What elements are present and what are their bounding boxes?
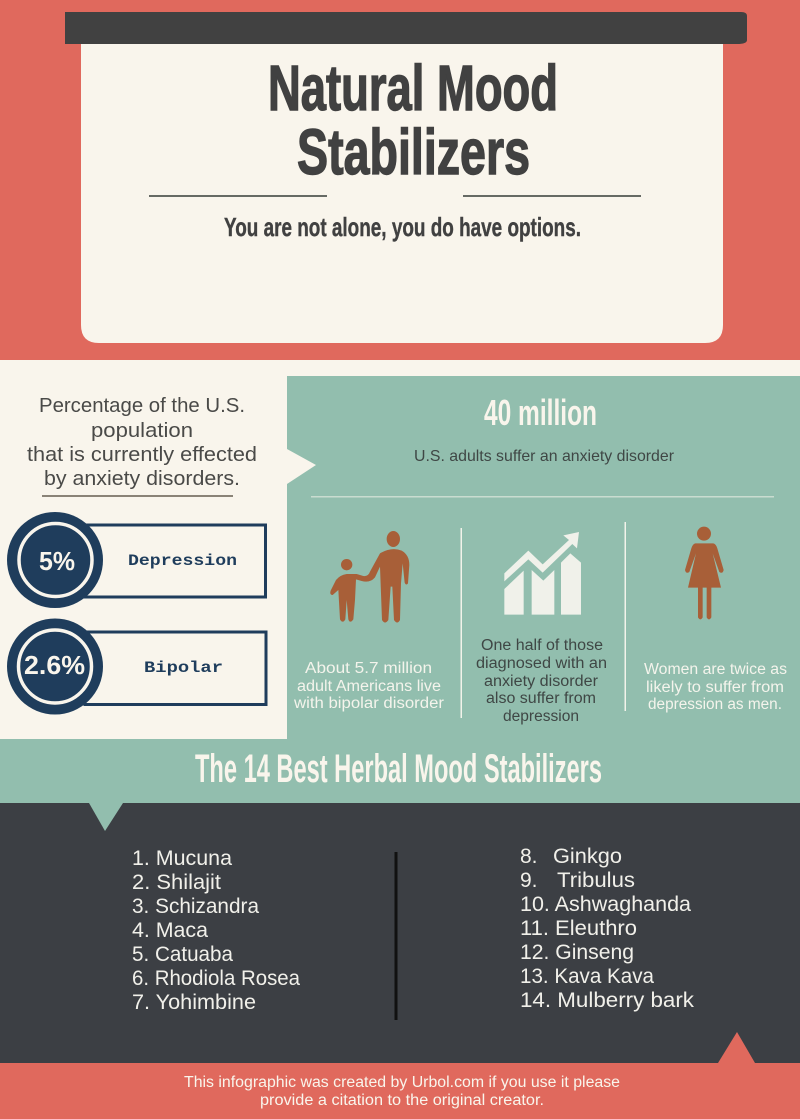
list: herbs 8 to 14: 12. Ginseng bbox=[520, 941, 634, 964]
title: Stabilizers bbox=[297, 116, 530, 188]
icon: rising chart bbox=[504, 532, 581, 615]
text: diagnosis fact: One half of those bbox=[481, 637, 603, 654]
text: women fact: likely to suffer from bbox=[646, 679, 784, 696]
pointer up bbox=[718, 1032, 755, 1063]
text: diagnosis fact bbox=[476, 637, 607, 725]
text block: percentage heading bbox=[27, 394, 257, 490]
list: herbs 8 to 14: Ginkgo bbox=[553, 845, 622, 868]
list: herbs 8 to 14: Tribulus bbox=[557, 869, 635, 892]
list: herbs 1 to 7: 5. Catuaba bbox=[132, 943, 233, 966]
stat: depression: 5% bbox=[39, 546, 75, 576]
text: diagnosis fact: anxiety disorder bbox=[484, 673, 598, 690]
stat: bipolar bbox=[7, 618, 266, 714]
panel: herbal list background bbox=[0, 803, 800, 1063]
text block: percentage heading: Percentage of the U.S. bbox=[39, 394, 245, 417]
icon: woman bbox=[685, 527, 724, 619]
stat: bipolar: 2.6% bbox=[24, 650, 85, 680]
header background bbox=[0, 0, 800, 360]
anxiety caption: U.S. adults suffer an anxiety disorder bbox=[414, 448, 675, 465]
list: herbs 1 to 7: 1. Mucuna bbox=[132, 847, 232, 870]
list: herbs 8 to 14: 13. Kava Kava bbox=[520, 965, 654, 988]
stat: depression: Depression bbox=[128, 552, 237, 570]
list: herbs 8 to 14: 8. bbox=[520, 845, 538, 868]
list: herbs 1 to 7: 3. Schizandra bbox=[132, 895, 259, 918]
list: herbs 8 to 14: 9. bbox=[520, 869, 538, 892]
footer credit: This infographic was created by Urbol.com if you use it please bbox=[184, 1074, 620, 1091]
footer credit: provide a citation to the original creator. bbox=[260, 1092, 544, 1109]
stat: bipolar: Bipolar bbox=[144, 659, 223, 677]
title: Natural Mood bbox=[268, 52, 558, 124]
text block: percentage heading: population bbox=[91, 419, 193, 442]
text: bipolar fact: with bipolar disorder bbox=[293, 695, 444, 712]
footer band bbox=[0, 1063, 800, 1119]
list: herbs 8 to 14: 11. Eleuthro bbox=[520, 917, 637, 940]
text: bipolar fact bbox=[293, 660, 444, 712]
icon: adult and child bbox=[330, 531, 409, 622]
list: herbs 1 to 7: 4. Maca bbox=[132, 919, 208, 942]
stat: depression bbox=[7, 512, 266, 608]
panel: title card bbox=[81, 44, 723, 343]
text: women fact: Women are twice as bbox=[644, 661, 787, 678]
pointer down bbox=[89, 803, 123, 831]
list: herbs 1 to 7: 6. Rhodiola Rosea bbox=[132, 967, 300, 990]
text: diagnosis fact: also suffer from bbox=[486, 690, 596, 707]
pointer notch bbox=[287, 449, 316, 484]
band: list heading bbox=[0, 739, 800, 803]
list: herbs 1 to 7 bbox=[132, 847, 300, 1014]
section background bbox=[0, 360, 800, 739]
list: herbs 1 to 7: 2. Shilajit bbox=[132, 871, 221, 894]
subtitle: You are not alone, you do have options. bbox=[224, 212, 581, 242]
list: herbs 1 to 7: 7. Yohimbine bbox=[132, 991, 256, 1014]
list: herbs 8 to 14 bbox=[520, 845, 695, 1012]
footer credit bbox=[184, 1074, 620, 1109]
text: women fact bbox=[644, 661, 787, 713]
text block: percentage heading: by anxiety disorders. bbox=[44, 467, 240, 490]
text: bipolar fact: adult Americans live bbox=[297, 678, 441, 695]
text block: percentage heading: that is currently effected bbox=[27, 443, 257, 466]
text: diagnosis fact: diagnosed with an bbox=[476, 655, 607, 672]
list: herbs 8 to 14: 14. Mulberry bark bbox=[520, 989, 695, 1012]
text: diagnosis fact: depression bbox=[503, 708, 579, 725]
list: herbs 8 to 14: 10. Ashwaghanda bbox=[520, 893, 691, 916]
text: women fact: depression as men. bbox=[648, 696, 782, 713]
title bbox=[268, 52, 558, 188]
text: bipolar fact: About 5.7 million bbox=[305, 660, 432, 677]
40 million heading: 40 million bbox=[484, 392, 597, 433]
panel: anxiety statistics bbox=[287, 376, 800, 739]
dark header bar bbox=[65, 12, 747, 44]
